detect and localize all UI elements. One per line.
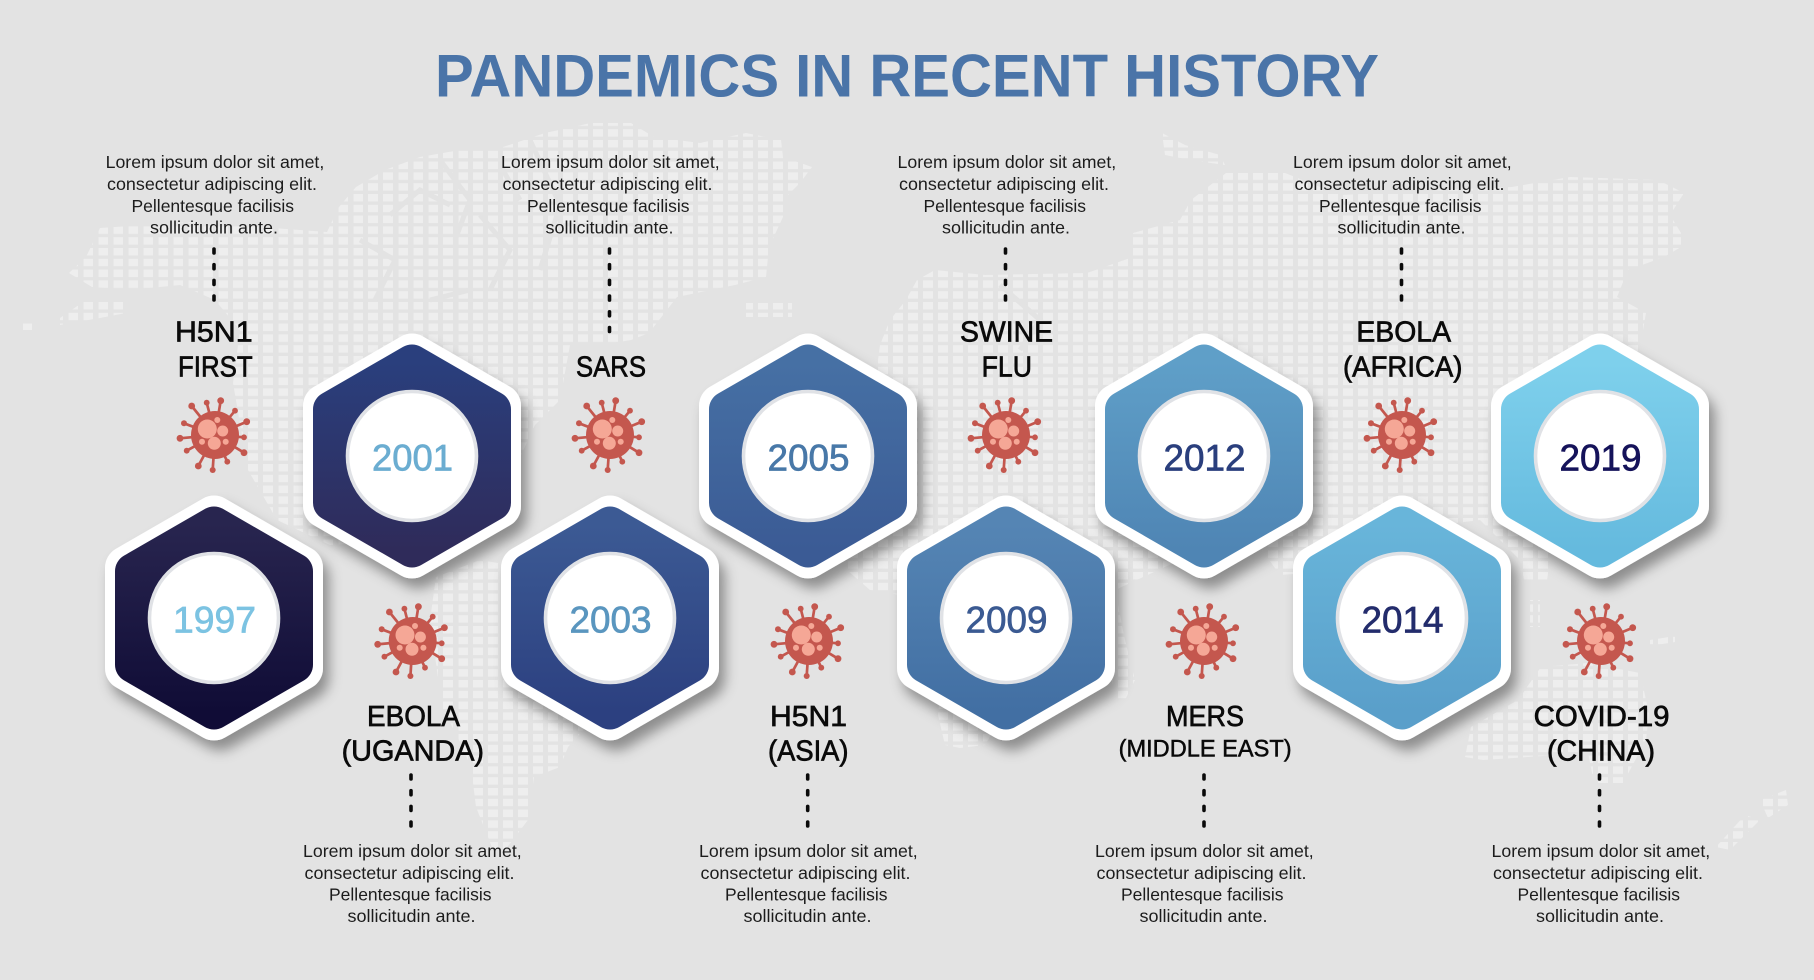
event: 2009 Swine flu [898,152,1116,718]
dotted connector [212,249,216,300]
description text: sollicitudin ante. [744,906,872,926]
description text: sollicitudin ante. [150,218,278,238]
description text: Pellentesque facilisis [1319,196,1482,216]
hexagon 2005: 2005 [768,438,850,478]
label: COVID-19 China: COVID-19 [1534,701,1670,733]
virus icon [1364,397,1437,473]
label: Ebola Africa: EBOLA [1356,317,1452,349]
description text [699,841,918,926]
hexagon 1997 [127,518,301,718]
hexagon 2001 [325,356,499,556]
description text: Lorem ipsum dolor sit amet, [1095,841,1314,861]
label: SARS: SARS [576,352,646,384]
event: 2001 Ebola Uganda [303,356,522,926]
label: H5N1 first: FIRST [178,352,253,384]
label: COVID-19 China: (CHINA) [1547,736,1655,768]
description text: consectetur adipiscing elit. [1294,174,1504,194]
description text: sollicitudin ante. [1536,906,1664,926]
label: MERS Middle East: MERS [1166,701,1244,733]
virus icon [374,603,448,679]
label: Ebola Africa: (AFRICA) [1343,352,1462,384]
description text: Pellentesque facilisis [132,196,294,216]
label: H5N1 first: H5N1 [175,317,253,349]
label: Ebola Africa [1343,317,1462,384]
description text: sollicitudin ante. [546,218,674,238]
description text [1492,841,1710,926]
description text: Lorem ipsum dolor sit amet, [1492,841,1710,861]
description text: Pellentesque facilisis [329,885,492,905]
description text: Lorem ipsum dolor sit amet, [898,152,1116,172]
hexagon 2005 [721,356,895,556]
label: MERS Middle East: (MIDDLE EAST) [1119,736,1292,763]
dotted connector [608,249,611,332]
description text: Lorem ipsum dolor sit amet, [1293,152,1512,172]
hexagon 2001: 2001 [372,438,453,478]
event: 2003 SARS [501,152,720,718]
description text: consectetur adipiscing elit. [502,174,712,194]
virus icon [1563,603,1636,679]
hexagon 2009: 2009 [966,600,1048,640]
virus icon [572,397,645,473]
description text: consectetur adipiscing elit. [107,174,317,194]
event: 2005 H5N1 Asia [699,356,918,926]
label: Swine flu: FLU [982,352,1032,384]
label: Ebola Uganda [342,701,484,768]
dotted connector [1202,775,1206,826]
description text: sollicitudin ante. [348,906,476,926]
hexagon 1997: 1997 [173,600,256,640]
label: Ebola Uganda: (UGANDA) [342,736,484,768]
dotted connector [1400,249,1403,300]
label: H5N1 Asia: H5N1 [770,701,847,733]
description text: Pellentesque facilisis [924,196,1086,216]
hexagon 2009 [919,518,1093,718]
description text: Pellentesque facilisis [725,885,888,905]
virus icon [177,397,250,473]
description text [1293,152,1512,238]
description text: Lorem ipsum dolor sit amet, [106,152,324,172]
hexagon 2019: 2019 [1560,438,1642,478]
description text: consectetur adipiscing elit. [1493,863,1703,883]
description text: sollicitudin ante. [1140,906,1268,926]
hexagon 2019 [1513,356,1687,556]
hexagon 2012 [1117,356,1291,556]
event: 1997 H5N1 first [106,152,324,718]
label: H5N1 Asia: (ASIA) [768,736,848,768]
world map dotted backdrop [23,123,1788,849]
title: PANDEMICS IN RECENT HISTORY [435,42,1379,110]
dotted connector [1598,775,1601,826]
label: MERS Middle East [1119,701,1292,763]
hexagon 2014: 2014 [1362,600,1444,640]
description text: Lorem ipsum dolor sit amet, [501,152,720,172]
event: 2012 MERS [1095,356,1314,926]
dotted connector [806,775,810,826]
description text: consectetur adipiscing elit. [1096,863,1306,883]
hexagon 2003 [523,518,697,718]
label: Ebola Uganda: EBOLA [367,701,461,733]
description text: Pellentesque facilisis [1121,885,1284,905]
description text: Lorem ipsum dolor sit amet, [303,841,522,861]
event: 2019 COVID-19 China [1492,356,1710,926]
event: 2014 Ebola Africa [1293,152,1512,718]
label: Swine flu: SWINE [960,317,1053,349]
description text: Pellentesque facilisis [1518,885,1680,905]
description text [898,152,1116,238]
hexagon 2014 [1315,518,1489,718]
dotted connector [409,775,413,826]
description text: consectetur adipiscing elit. [899,174,1109,194]
description text [106,152,324,238]
description text: Lorem ipsum dolor sit amet, [699,841,918,861]
hexagon 2003: 2003 [570,600,652,640]
label: Swine flu [960,317,1053,384]
virus icon [968,397,1041,473]
description text [1095,841,1314,926]
hexagon 2012: 2012 [1164,438,1246,478]
description text [303,841,522,926]
description text [501,152,720,238]
virus icon [771,603,844,679]
virus icon [1166,603,1239,679]
label: COVID-19 China [1534,701,1670,768]
dotted connector [1004,249,1007,300]
description text: consectetur adipiscing elit. [700,863,910,883]
label: H5N1 Asia [768,701,848,768]
description text: Pellentesque facilisis [527,196,690,216]
description text: sollicitudin ante. [942,218,1070,238]
description text: consectetur adipiscing elit. [304,863,514,883]
description text: sollicitudin ante. [1338,218,1466,238]
label: H5N1 first [175,317,253,384]
